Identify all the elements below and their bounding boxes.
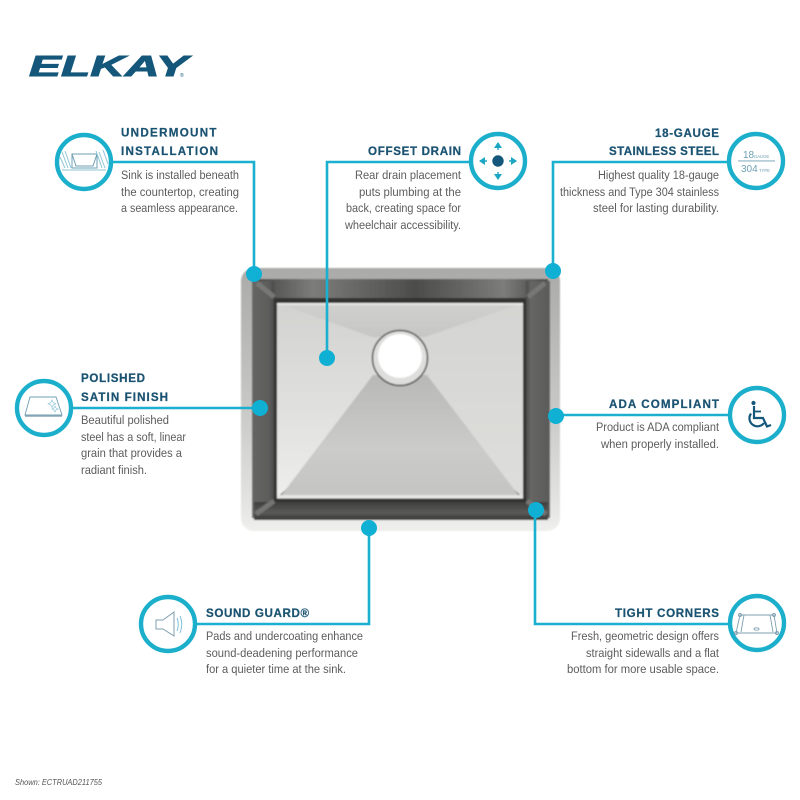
text: polished description: Beautiful polished [81,413,169,427]
text: offset drain description: back, creating space for [346,201,461,215]
text: tight corners description: straight sidewalls and a flat [586,646,719,660]
callout: polished satin finish [17,372,268,477]
text: 18-gauge description: Highest quality 18-gauge [598,168,719,182]
icon: 18 gauge 304 type: TYPE [759,168,770,173]
logo: Elkay: ® [180,72,184,79]
text: 18-gauge description [560,168,719,215]
text: 18-gauge description: thickness and Type 304 stainless [560,185,719,199]
icon: wheelchair [749,401,771,426]
text: undermount description: Sink is installed beneath [121,168,239,182]
logo: Elkay [29,51,192,83]
text: polished description: steel has a soft, linear [81,430,186,444]
text: 18-gauge description: steel for lasting durability. [593,201,719,215]
text: offset drain description: Rear drain placement [355,168,461,182]
heading: undermount installation: UNDERMOUNT [121,126,216,140]
text: tight corners description [567,629,719,676]
text: ADA description: when properly installed. [600,437,719,451]
text: undermount description: the countertop, creating [121,185,239,199]
icon: undermount sink [60,150,108,170]
icon: 18 gauge 304 type: 18 [743,150,755,161]
heading: sound guard: SOUND GUARD® [206,607,309,620]
callout: 18-gauge stainless steel [545,127,783,279]
heading: offset drain: OFFSET DRAIN [368,145,461,158]
icon: 18 gauge 304 type: GAUGE [754,154,769,159]
logo: Elkay: ELKAY [29,51,192,83]
text: polished description [81,413,186,477]
heading: undermount installation: INSTALLATION [121,145,218,158]
heading: polished satin finish: POLISHED [81,372,145,385]
text: ADA description: Product is ADA compliant [596,420,719,434]
callout: undermount installation [57,126,262,282]
text: undermount description [121,168,239,215]
text: sound guard description: Pads and undercoating enhance [206,629,363,643]
icon: speaker [156,612,182,636]
heading: ADA compliant: ADA COMPLIANT [609,398,719,411]
icon: 18 gauge 304 type [738,150,775,175]
text: sound guard description [206,629,363,676]
callout: sound guard [141,520,377,676]
text: polished description: radiant finish. [81,463,147,477]
heading: polished satin finish [81,372,168,404]
callout: ADA compliant [548,388,784,451]
heading: 18-gauge stainless steel [609,127,719,158]
text: offset drain description: wheelchair accessibility. [344,218,461,232]
text: ADA description [596,420,719,451]
icon: polished surface [25,397,62,416]
text: offset drain description [344,168,461,232]
text: polished description: grain that provides a [81,446,182,460]
heading: undermount installation [121,126,218,158]
text: tight corners description: Fresh, geometric design offers [571,629,719,643]
footnote: model number: Shown: ECTRUAD211755 [15,778,102,787]
icon: offset drain arrows [479,142,517,180]
callout: offset drain [319,134,525,366]
text: tight corners description: bottom for more usable space. [567,662,719,676]
text: sound guard description: sound-deadening performance [206,646,358,660]
text: undermount description: a seamless appearance. [121,201,238,215]
heading: 18-gauge stainless steel: 18-GAUGE [655,127,719,140]
callout: tight corners [528,502,784,676]
text: sound guard description: for a quieter time at the sink. [206,662,346,676]
heading: polished satin finish: SATIN FINISH [81,391,168,404]
icon: 18 gauge 304 type: 304 [741,164,758,175]
heading: 18-gauge stainless steel: STAINLESS STEEL [609,145,719,158]
sink product photo [241,268,560,531]
icon: sink corners [734,614,778,634]
heading: tight corners: TIGHT CORNERS [615,607,719,620]
text: offset drain description: puts plumbing at the [359,185,461,199]
